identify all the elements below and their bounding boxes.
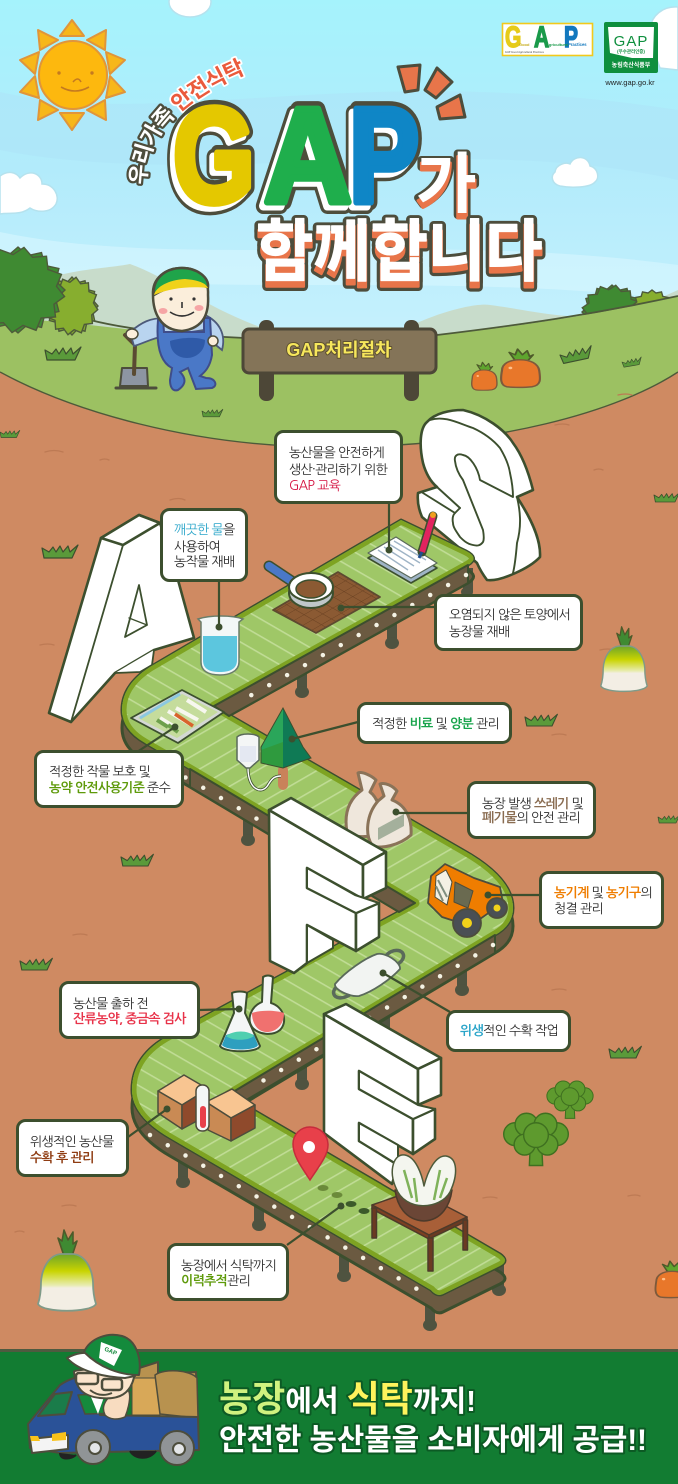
callout: GAP education (276, 432, 402, 554)
callout: fertiliser (288, 704, 510, 742)
item: produce boxes and test tube (158, 1075, 255, 1141)
conveyor belt (120, 515, 513, 1313)
title 함께합니다: 함께합니다 (256, 220, 543, 295)
farmer character with shovel (116, 268, 223, 390)
title GAP (169, 79, 419, 235)
item: tractor (428, 864, 507, 937)
right bushes (579, 281, 671, 343)
callout: soil: 농장물 재배 (449, 625, 510, 638)
logo: GAP certification mark: (우수관리인증) (617, 48, 645, 55)
callout: fertiliser: 적정한 비료 및 양분 관리 (372, 717, 499, 730)
title GAP: P (349, 79, 419, 231)
title GAP: A (264, 81, 352, 231)
title GAP: G (169, 83, 251, 235)
callout: GAP education: 생산·관리하기 위한 (289, 463, 388, 476)
letter S (418, 410, 540, 580)
title 가: 가 (416, 152, 477, 226)
callout: machinery: 농기계 및 농기구의 (554, 886, 652, 899)
title 함께합니다: 함께합니다 (256, 215, 543, 290)
callout: pesticide use (36, 724, 182, 806)
callout: machinery (484, 872, 662, 928)
item: soil with magnifier (269, 566, 380, 633)
callout: traceability: 농장에서 식탁까지 (181, 1259, 276, 1272)
callout: GAP education: 농산물을 안전하게 (289, 446, 384, 459)
callout: GAP education: GAP 교육 (289, 479, 341, 492)
callout: clean water (162, 510, 246, 630)
mountains (0, 264, 678, 345)
title GAP: P (345, 83, 415, 235)
callout: hygienic harvest (380, 970, 570, 1050)
callout: soil (338, 596, 582, 650)
item: pesticide chart tablet (131, 690, 224, 743)
carrot at right edge (655, 1261, 678, 1298)
title 함께합니다: 함께합니다 (256, 214, 543, 289)
item: waste sacks (346, 773, 411, 847)
broccoli (504, 1081, 593, 1166)
title kicker: 우리가족 안전식탁: 우리가족 안전식탁 (128, 56, 246, 184)
title GAP: P (349, 79, 419, 231)
title GAP: G (169, 83, 251, 235)
footer message (219, 1378, 647, 1457)
logo: GAP Good Agricultural Practices: A (534, 22, 549, 54)
callout: machinery: 청결 관리 (554, 902, 603, 915)
letter F (269, 798, 386, 973)
logo: GAP Good Agricultural Practices: Good (519, 42, 530, 47)
callout: traceability: 이력추적관리 (181, 1274, 250, 1287)
letter E (324, 1004, 441, 1184)
logo: GAP Good Agricultural Practices: Agricultural (546, 42, 568, 47)
sky background (0, 0, 678, 420)
footer message: 안전한 농산물을 소비자에게 공급!! (219, 1424, 647, 1457)
conveyor legs (176, 568, 506, 1331)
footer truck with driver: GAP (103, 1347, 118, 1357)
title 가: 가 (416, 147, 477, 221)
callout: hygienic harvest: 위생적인 수확 작업 (460, 1023, 558, 1037)
item: table with cabbage bowl (372, 1155, 468, 1271)
ground (0, 340, 678, 1360)
logo: GAP certification mark: 농림축산식품부 (612, 61, 651, 69)
callout: residue testing: 농산물 출하 전 (73, 997, 148, 1010)
item: map pin (293, 1127, 328, 1180)
sun (20, 20, 125, 130)
callout: pesticide use: 농약 안전사용기준 준수 (49, 781, 171, 794)
callout: clean water: 농작물 재배 (174, 555, 235, 568)
title kicker: 우리가족 안전식탁: 우리가족 안전식탁 (126, 103, 178, 186)
grass tufts (0, 346, 678, 1058)
daikon radishes (38, 627, 647, 1311)
item: test flasks (220, 976, 284, 1051)
footer band (0, 1349, 678, 1484)
logo: GAP Good Agricultural Practices: Practices (568, 42, 587, 47)
logo: GAP certification mark: GAP (614, 33, 648, 50)
callout: clean water: 사용하여 (174, 540, 220, 553)
logo: GAP Good Agricultural Practices: G (505, 22, 521, 54)
callout: residue testing: 잔류농약, 중금속 검사 (73, 1012, 187, 1025)
green hill (0, 296, 678, 447)
item: hygiene mask (331, 947, 406, 1001)
footer truck with driver (28, 1335, 199, 1465)
title GAP: A (260, 85, 348, 235)
footer message: 농장에서 식탁까지! (219, 1378, 476, 1419)
logo: GAP certification mark: www.gap.go.kr (604, 78, 655, 87)
title GAP: G (173, 79, 255, 231)
item: water beaker (198, 616, 243, 675)
title GAP: G (173, 79, 255, 231)
callout: waste: 농장 발생 쓰레기 및 (482, 797, 583, 810)
carrots on hill (472, 349, 540, 390)
dirt marks (15, 394, 640, 1232)
logo: GAP Good Agricultural Practices (502, 22, 592, 56)
title burst marks (398, 65, 465, 119)
logo: GAP certification mark (604, 22, 658, 87)
clouds (0, 0, 678, 214)
callout: post-harvest (18, 1106, 170, 1176)
callout: post-harvest: 위생적인 농산물 (30, 1135, 114, 1148)
wooden sign: GAP처리절차 (243, 320, 436, 401)
title GAP: A (260, 85, 348, 235)
callout: pesticide use: 적정한 작물 보호 및 (49, 765, 150, 778)
callout: waste (392, 782, 594, 838)
letter A (49, 515, 194, 722)
logo: GAP Good Agricultural Practices: P (564, 22, 578, 54)
title GAP: P (345, 83, 415, 235)
item: footprint dots (318, 1185, 370, 1214)
callout: traceability (168, 1202, 344, 1300)
title 가: 가 (416, 149, 477, 223)
logo: GAP Good Agricultural Practices: GAP Good Agricultural Practices (505, 51, 545, 54)
callout: waste: 폐기물의 안전 관리 (482, 811, 580, 824)
callout: post-harvest: 수확 후 관리 (30, 1151, 93, 1164)
item: tree with fertiliser drip (237, 708, 311, 790)
left bushes (0, 241, 102, 339)
title GAP: A (264, 81, 352, 231)
item: notebook and pen (368, 512, 437, 583)
callout: residue testing (60, 982, 242, 1038)
callout: soil: 오염되지 않은 토양에서 (449, 608, 570, 621)
title 함께합니다: 함께합니다 (256, 220, 543, 295)
callout: clean water: 깨끗한 물을 (174, 523, 235, 536)
wooden sign: GAP처리절차: GAP처리절차 (286, 340, 392, 360)
